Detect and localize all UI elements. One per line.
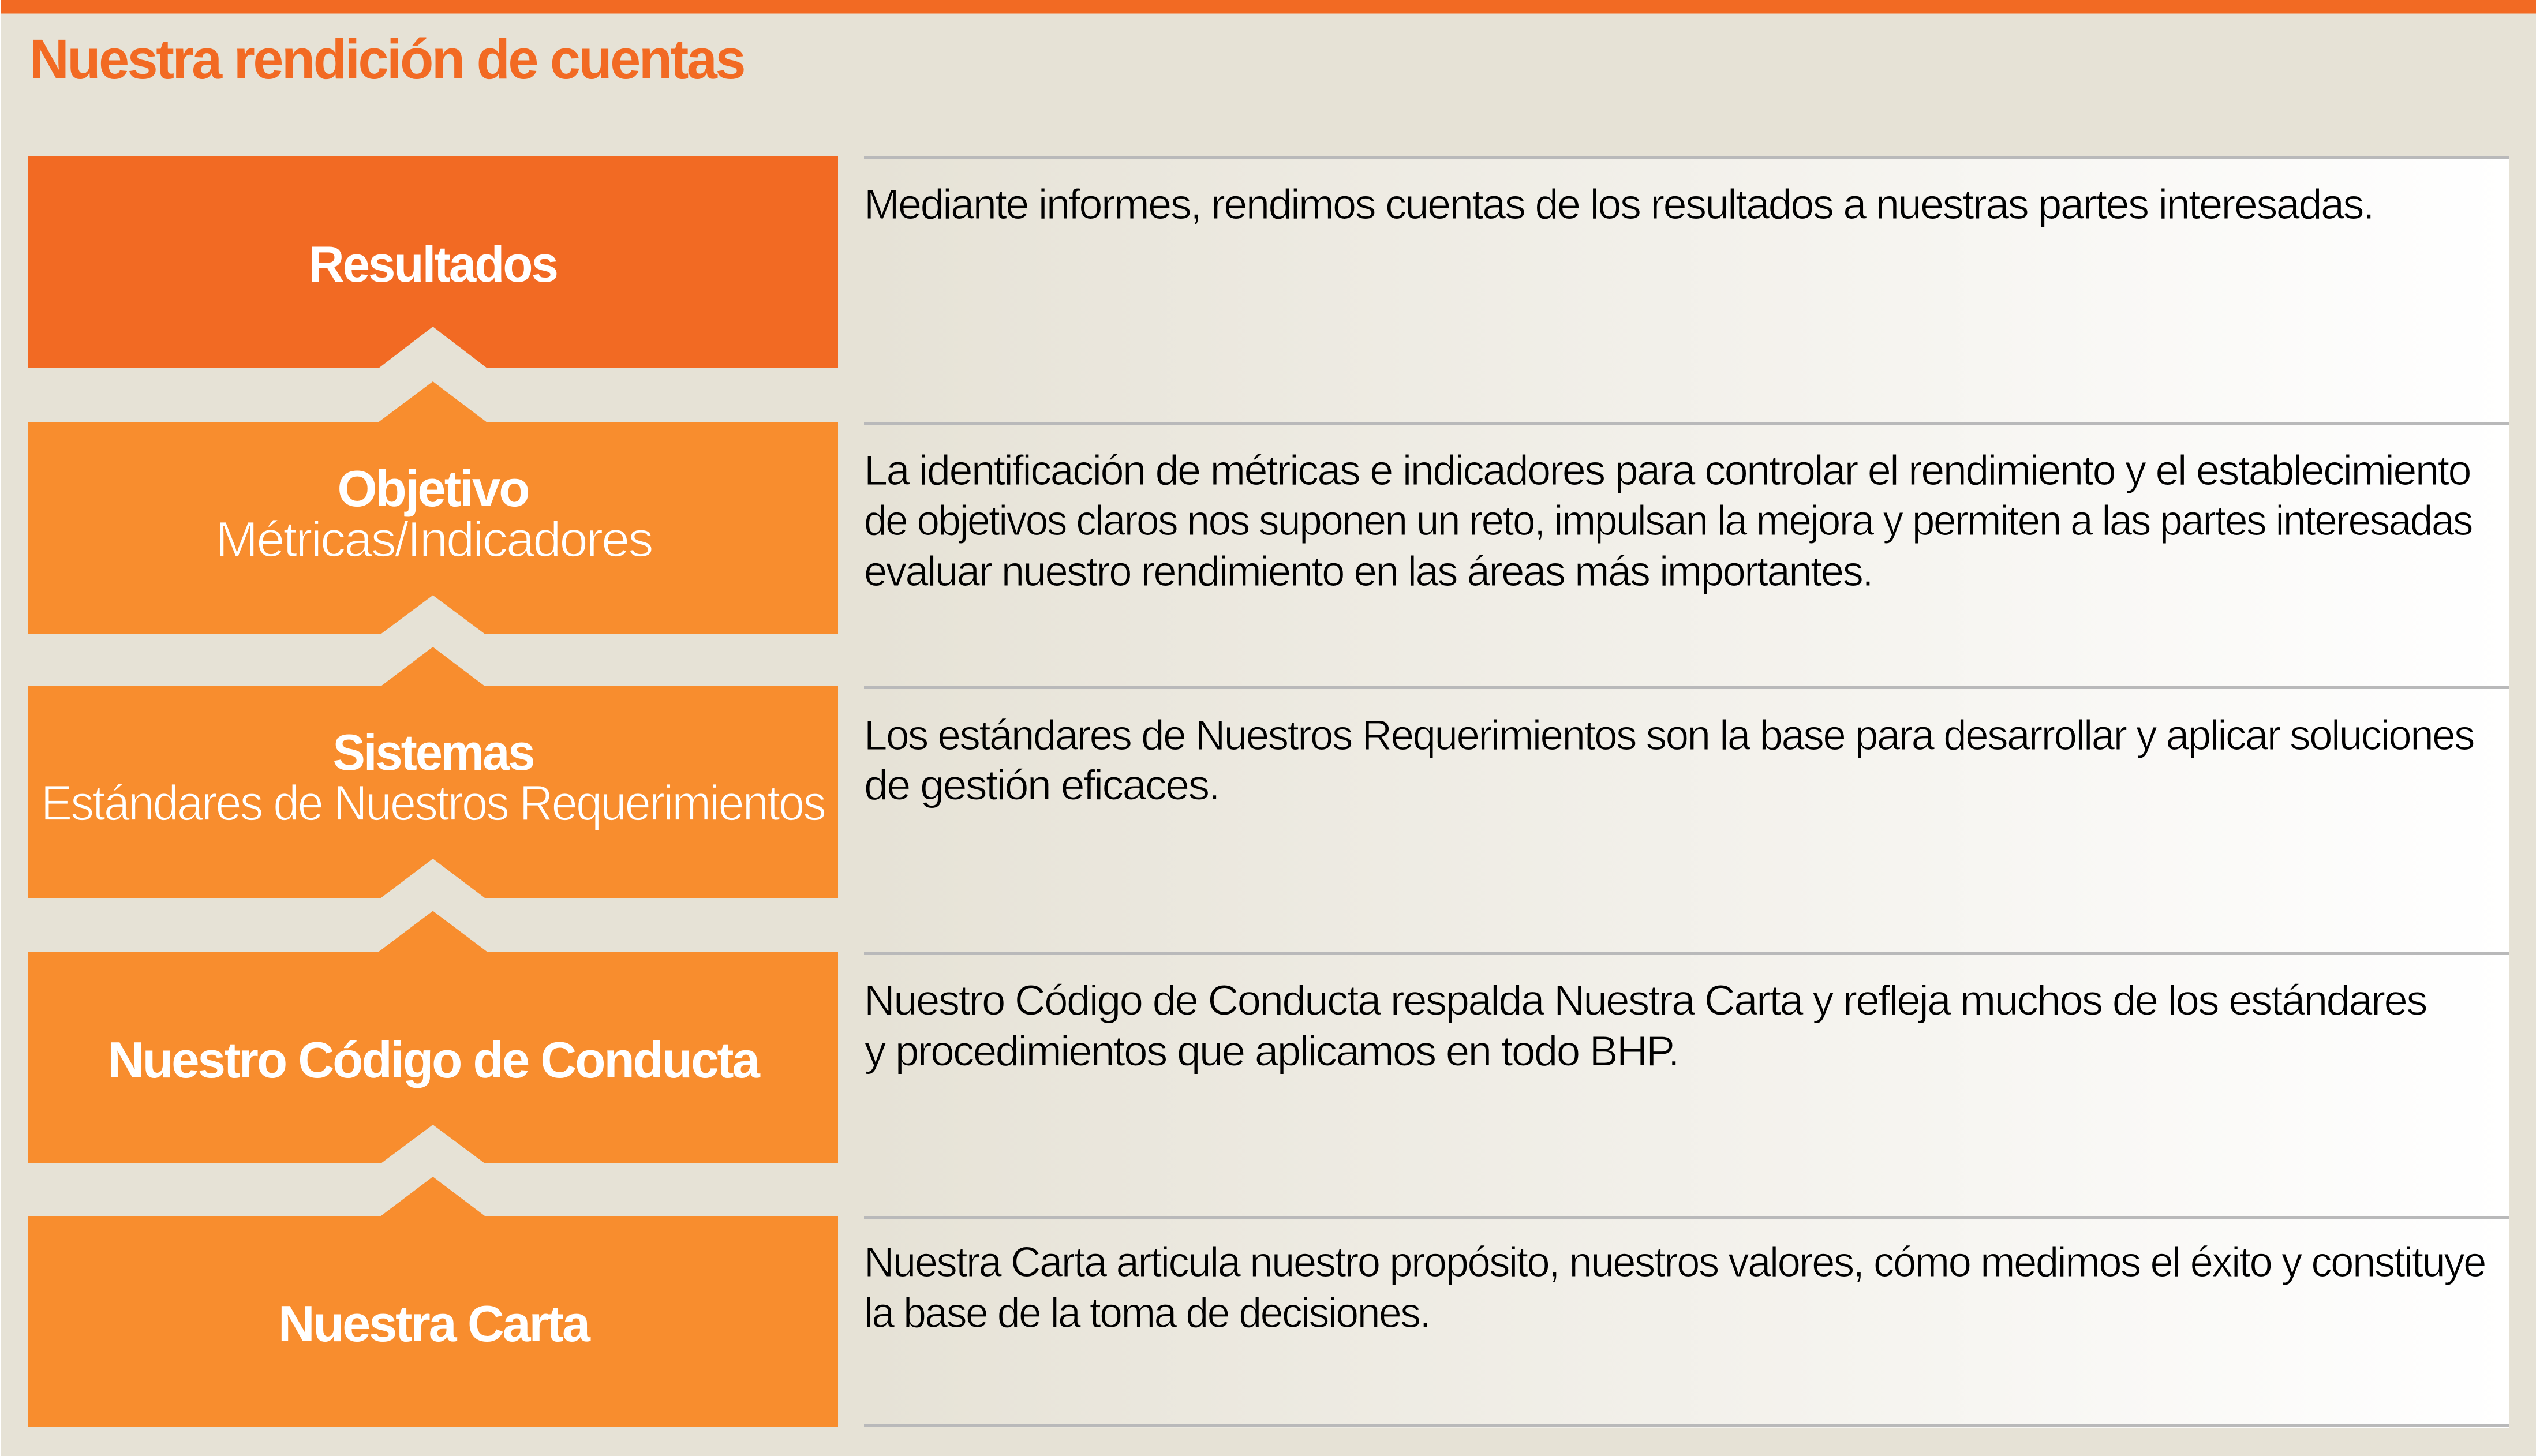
text block: Nuestra Carta description <box>864 1216 2509 1427</box>
text block: Código de Conducta description <box>864 952 2509 1075</box>
shape: orange box with arrow tip and notch <box>28 911 838 1163</box>
shape: orange box with arrow tip and notch <box>28 381 838 634</box>
panel: gradient background for descriptions <box>864 156 2509 1428</box>
text block: Sistemas description: de gestión eficaces. <box>864 762 1219 809</box>
text block: Código de Conducta description: Nuestro Código de Conducta respalda Nuestra Carta y refleja muchos de los estándares <box>864 978 2426 1024</box>
text block: Nuestra Carta description: la base de la toma de decisiones. <box>864 1290 1430 1337</box>
label: Nuestra Carta: Nuestra Carta <box>278 1295 591 1352</box>
text block: Sistemas description: Los estándares de Nuestros Requerimientos son la base para desarrollar y aplicar soluciones <box>864 712 2474 759</box>
text block: Objetivo description: de objetivos claros nos suponen un reto, impulsan la mejora y permiten a las partes interesadas <box>864 497 2472 544</box>
shape: orange box with arrow tip and notch <box>28 647 838 898</box>
label: Estándares de Nuestros Requerimientos: Estándares de Nuestros Requerimientos <box>41 776 825 831</box>
shape: orange box with arrow tip <box>28 1177 838 1427</box>
panel: Resultados box <box>28 156 838 368</box>
label: Objetivo: Objetivo <box>337 460 529 517</box>
text block: Código de Conducta description: y procedimientos que aplicamos en todo BHP. <box>865 1028 1678 1075</box>
panel: Sistemas box <box>28 647 838 898</box>
panel: Nuestro Código de Conducta box <box>28 911 838 1163</box>
shape: dark orange box with notch <box>28 156 838 368</box>
text block: Objetivo description: La identificación de métricas e indicadores para controlar el rendimiento y el establecimiento <box>864 447 2470 494</box>
label: Sistemas: Sistemas <box>332 724 534 781</box>
top orange bar <box>1 0 2536 14</box>
panel: Objetivo box <box>28 381 838 634</box>
text block: Sistemas description <box>864 686 2509 809</box>
text block: Objetivo description <box>864 422 2509 595</box>
panel: Nuestra Carta box <box>28 1177 838 1427</box>
text block: Nuestra Carta description: Nuestra Carta articula nuestro propósito, nuestros valores, cómo medimos el éxito y constituye <box>864 1239 2485 1286</box>
text block: Resultados description: Mediante informes, rendimos cuentas de los resultados a nuestras partes interesadas. <box>864 181 2373 228</box>
label: Métricas/Indicadores: Métricas/Indicadores <box>216 512 652 567</box>
text block: Objetivo description: evaluar nuestro rendimiento en las áreas más importantes. <box>864 548 1872 595</box>
text block: Resultados description <box>864 156 2509 228</box>
label: Resultados: Resultados <box>309 235 557 293</box>
title: Nuestra rendición de cuentas <box>29 28 744 91</box>
label: Nuestro Código de Conducta: Nuestro Código de Conducta <box>108 1031 761 1088</box>
